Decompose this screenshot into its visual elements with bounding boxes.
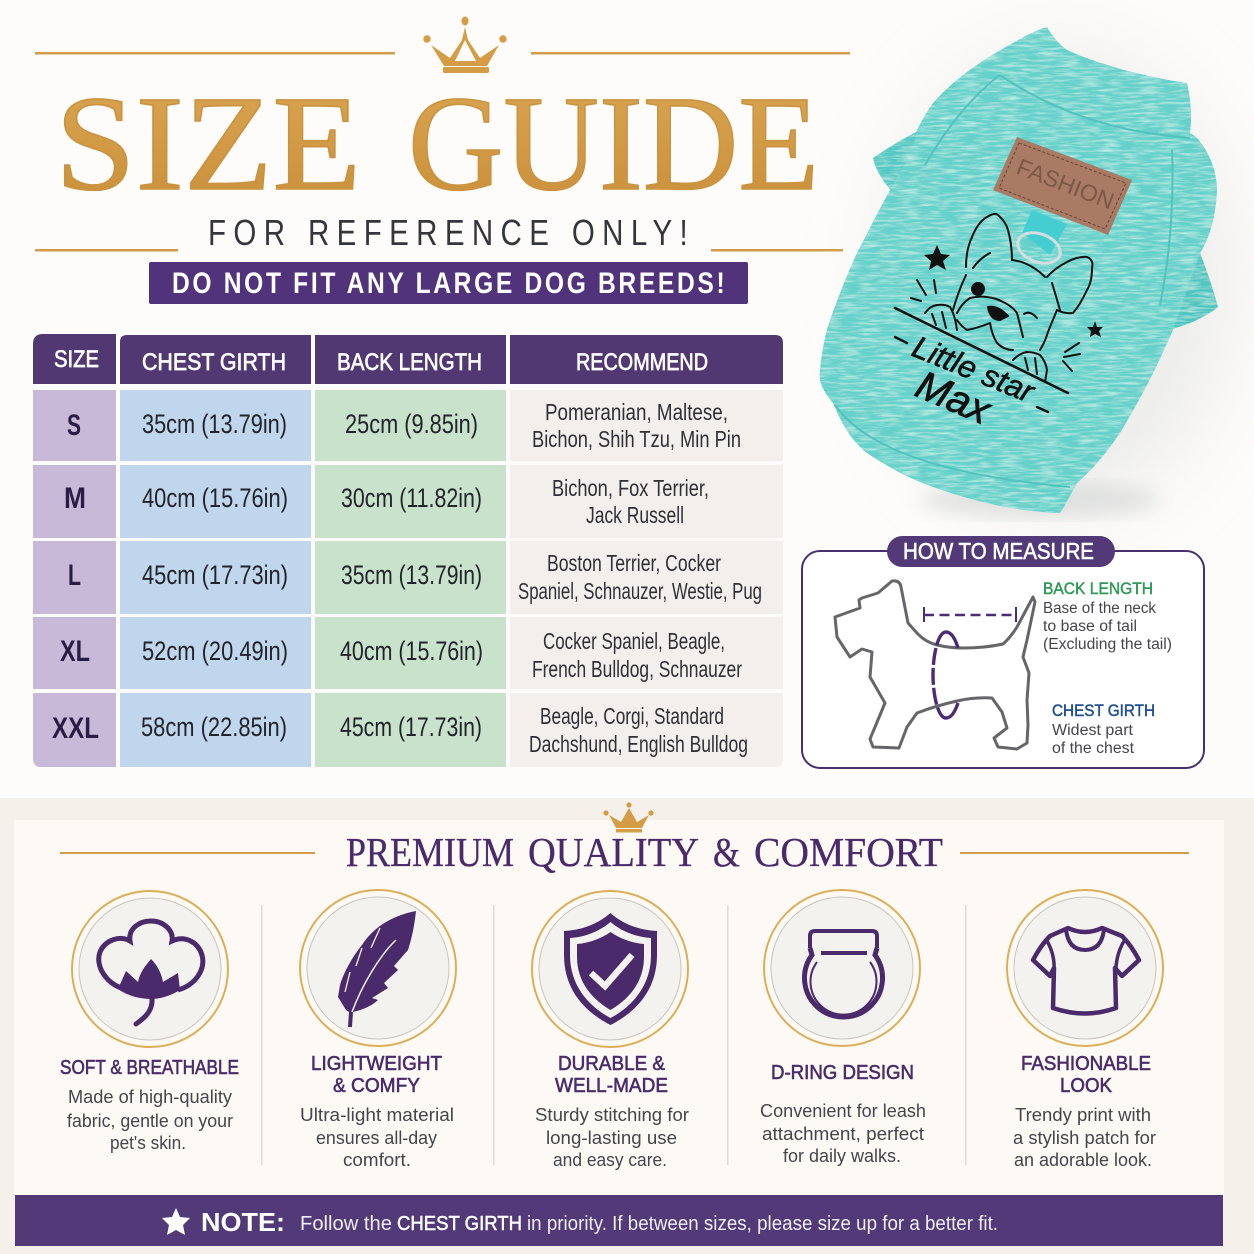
row XL: Cocker Spaniel, Beagle,	[543, 628, 725, 654]
panel: premium quality	[14, 802, 1224, 1195]
note bar	[15, 1195, 1223, 1246]
heading: premium quality and comfort: COMFORT	[754, 829, 943, 875]
row XL: 40cm (15.76in)	[340, 636, 483, 666]
leather patch	[993, 137, 1132, 235]
feature: lightweight and comfy	[300, 890, 456, 1170]
section rules	[60, 852, 1189, 854]
panel: how to measure	[802, 536, 1204, 768]
lower section backdrop	[0, 798, 1254, 1254]
size table	[33, 334, 783, 767]
table header row: RECOMMEND	[576, 349, 708, 376]
feature: lightweight and comfy: Ultra-light material	[300, 1105, 454, 1125]
subtitle: for reference only: FOR REFERENCE ONLY!	[208, 212, 688, 253]
feature: fashionable look: FASHIONABLE	[1021, 1053, 1151, 1075]
back length legend: to base of tail	[1043, 618, 1137, 635]
note bar: Follow the	[300, 1213, 392, 1235]
title: SIZE GUIDE: GUIDE	[408, 69, 819, 219]
table header row	[33, 334, 783, 384]
feature: d-ring design	[760, 890, 926, 1166]
row M: 40cm (15.76in)	[142, 483, 288, 513]
back length legend: Base of the neck	[1043, 600, 1156, 617]
title: SIZE GUIDE	[55, 69, 819, 219]
row L	[33, 541, 783, 614]
icon: small crown	[603, 802, 654, 832]
icon: star	[162, 1208, 190, 1235]
row S	[33, 390, 783, 461]
row M: Bichon, Fox Terrier,	[552, 475, 709, 501]
row XL: French Bulldog, Schnauzer	[532, 656, 742, 682]
row M: Jack Russell	[586, 502, 684, 528]
row XL: XL	[60, 635, 90, 668]
feature: d-ring design: D-RING DESIGN	[771, 1062, 914, 1084]
chest girth legend: CHEST GIRTH	[1052, 701, 1155, 720]
icon: gold crown	[423, 16, 507, 73]
row S: S	[67, 409, 81, 442]
row S: Pomeranian, Maltese,	[545, 399, 728, 425]
row XXL: Dachshund, English Bulldog	[529, 731, 748, 757]
row M: 30cm (11.82in)	[341, 483, 482, 513]
chest girth legend: Widest part	[1052, 722, 1134, 739]
table header row: BACK LENGTH	[337, 349, 482, 376]
feature: fashionable look: Trendy print with	[1015, 1105, 1151, 1125]
row XXL: Beagle, Corgi, Standard	[540, 703, 724, 729]
row XXL: 58cm (22.85in)	[141, 712, 287, 742]
heading: premium quality and comfort: &	[713, 829, 740, 875]
how to measure heading pill: HOW TO MEASURE	[903, 538, 1094, 564]
feature: soft and breathable: pet's skin.	[110, 1133, 186, 1153]
chest girth legend	[1052, 701, 1155, 757]
row XL	[33, 617, 783, 689]
feature: soft and breathable: Made of high-quality	[68, 1087, 232, 1107]
row L: 45cm (17.73in)	[142, 560, 288, 590]
back length legend: BACK LENGTH	[1043, 579, 1153, 598]
row S: 35cm (13.79in)	[142, 409, 287, 439]
feature: durable and well-made: DURABLE &	[558, 1053, 666, 1075]
back length marker	[924, 614, 1016, 616]
back length legend	[1043, 579, 1172, 653]
top gold rules	[35, 52, 850, 252]
row L: 35cm (13.79in)	[341, 560, 482, 590]
row S: Bichon, Shih Tzu, Min Pin	[532, 426, 741, 452]
sweater backdrop glow	[890, 50, 1230, 510]
feature: lightweight and comfy: & COMFY	[333, 1075, 420, 1097]
sweater body	[820, 27, 1217, 513]
feature: d-ring design: Convenient for leash	[760, 1101, 926, 1121]
feature: durable and well-made: WELL-MADE	[555, 1075, 668, 1097]
print text: Little star: Little star	[907, 329, 1041, 410]
icon: d-ring	[764, 890, 920, 1046]
note bar: NOTE:	[201, 1207, 285, 1237]
icon: cotton	[72, 891, 228, 1047]
heading: premium quality and comfort	[346, 829, 943, 875]
feature: lightweight and comfy: LIGHTWEIGHT	[311, 1053, 442, 1075]
feature: soft and breathable: SOFT & BREATHABLE	[60, 1057, 239, 1079]
feature: durable and well-made: and easy care.	[553, 1150, 667, 1170]
feature: fashionable look: LOOK	[1060, 1075, 1113, 1097]
near sleeve	[873, 130, 935, 192]
icon: shield	[532, 891, 688, 1047]
feature: d-ring design: attachment, perfect	[762, 1124, 924, 1144]
far sleeve	[1150, 240, 1218, 330]
icon: feather	[300, 890, 456, 1046]
row M	[33, 465, 783, 538]
feature: soft and breathable	[60, 891, 239, 1153]
back length legend: (Excluding the tail)	[1043, 636, 1172, 653]
note bar: in priority. If between sizes, please size up for a better fit.	[527, 1213, 998, 1235]
row S: 25cm (9.85in)	[345, 409, 478, 439]
row L: L	[68, 559, 81, 592]
table header row: CHEST GIRTH	[142, 349, 286, 376]
feature: fashionable look: a stylish patch for	[1013, 1128, 1156, 1148]
chest girth legend: of the chest	[1052, 740, 1135, 757]
table header row: SIZE	[54, 346, 99, 373]
feature: lightweight and comfy: ensures all-day	[316, 1128, 437, 1148]
feature: soft and breathable: fabric, gentle on your	[67, 1111, 233, 1131]
note bar: CHEST GIRTH	[397, 1213, 522, 1235]
heading: premium quality and comfort: QUALITY	[528, 829, 699, 875]
feature: durable and well-made	[532, 891, 689, 1170]
row XXL	[33, 693, 783, 767]
row L: Boston Terrier, Cocker	[547, 550, 721, 576]
feature: durable and well-made: Sturdy stitching for	[535, 1105, 689, 1125]
print text: Max: Max	[909, 363, 998, 434]
feature: fashionable look	[1007, 890, 1163, 1170]
leather patch: FASHION	[1013, 153, 1118, 214]
chest girth marker	[933, 632, 946, 718]
feature: lightweight and comfy: comfort.	[343, 1150, 411, 1170]
title: SIZE GUIDE: SIZE	[55, 69, 361, 219]
dog outline diagram	[835, 581, 1035, 749]
row XXL: 45cm (17.73in)	[340, 712, 482, 742]
sweater shadow	[920, 482, 1160, 518]
feature: d-ring design: for daily walks.	[783, 1146, 901, 1166]
heading: premium quality and comfort: PREMIUM	[346, 829, 514, 875]
french bulldog print	[895, 214, 1103, 412]
row L: Spaniel, Schnauzer, Westie, Pug	[518, 578, 762, 604]
icon: t-shirt	[1007, 890, 1163, 1046]
strap and D-ring	[1014, 210, 1067, 269]
column dividers	[261, 905, 966, 1165]
feature: fashionable look: an adorable look.	[1014, 1150, 1152, 1170]
feature: durable and well-made: long-lasting use	[546, 1128, 677, 1148]
collar seam	[925, 75, 1190, 305]
sweater product photo	[820, 27, 1218, 518]
row M: M	[64, 482, 86, 515]
row XXL: XXL	[52, 712, 99, 745]
warning banner: DO NOT FIT ANY LARGE DOG BREEDS!	[172, 266, 725, 300]
row XL: 52cm (20.49in)	[142, 636, 288, 666]
